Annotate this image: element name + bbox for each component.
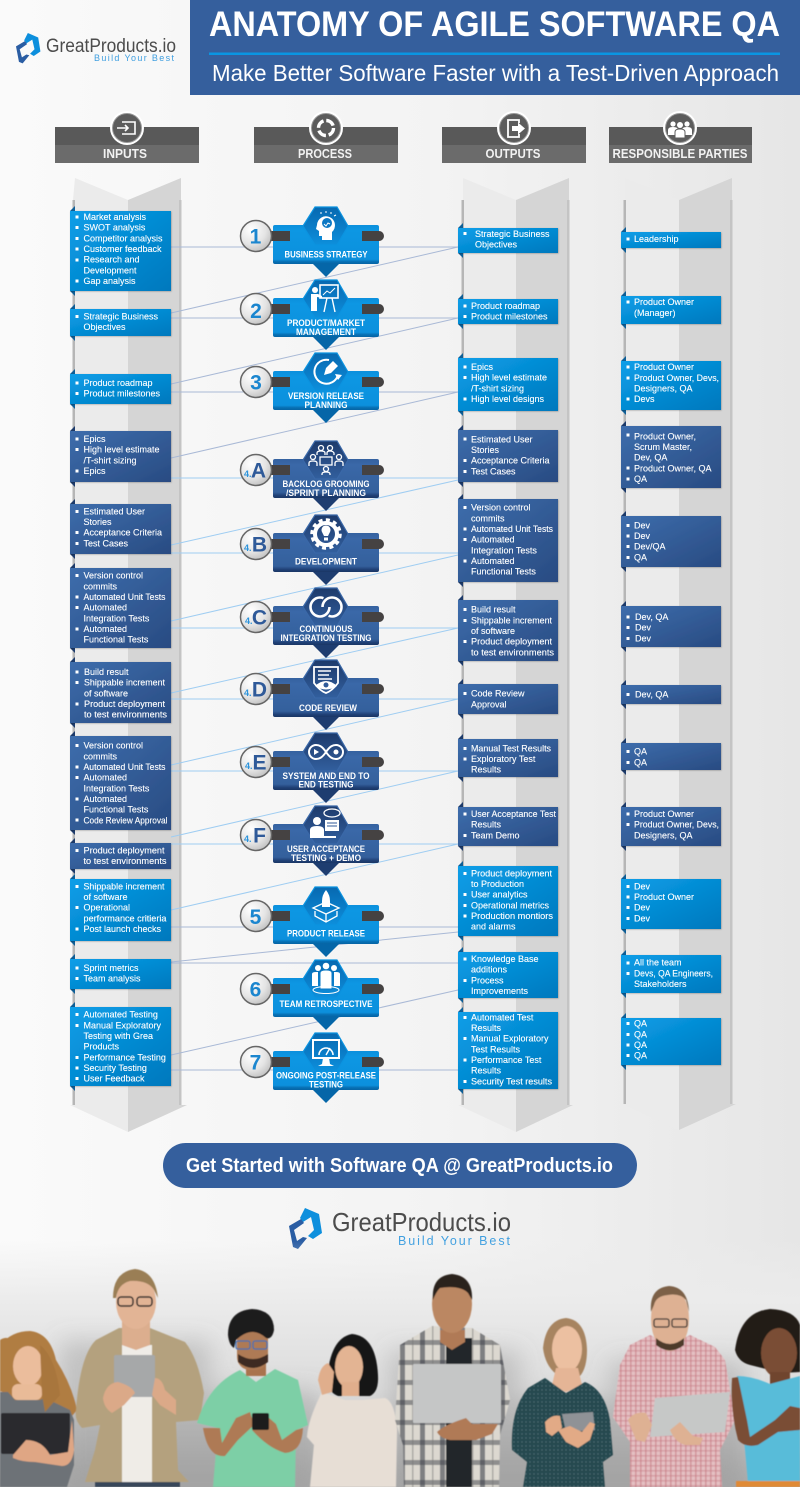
responsible box: dev qa dev dev xyxy=(621,601,721,652)
output box: build result xyxy=(458,595,558,666)
output box: product deployment to production: Production montiors xyxy=(471,911,554,921)
input box: product deployment xyxy=(70,838,171,874)
input box: automated testing: Automated Testing xyxy=(84,1010,158,1020)
process step 4C: continuous integration testing xyxy=(240,588,384,658)
input box: shippable increment: Operational xyxy=(84,903,130,913)
input box: estimated user stories xyxy=(70,499,171,559)
process step 4D: code review: 4. xyxy=(244,688,252,698)
input box: market analysis: Market analysis xyxy=(84,212,147,222)
column ribbon: responsible parties xyxy=(622,178,736,1130)
output box: version control commits: Functional Tests xyxy=(471,567,536,577)
process step 3: version release planning: 3 xyxy=(250,372,262,394)
output box: estimated user stories: Acceptance Criteria xyxy=(471,456,550,466)
input box: version control commits: Version control xyxy=(84,571,143,581)
responsible box: qa four times: QA xyxy=(634,1029,647,1039)
icon: output arrow xyxy=(508,120,519,137)
icon: infinity loop xyxy=(309,745,343,759)
input box: market analysis: Competitor analysis xyxy=(84,233,163,243)
output box: product roadmap: Product milestones xyxy=(471,312,548,322)
process step 3: version release planning: PLANNING xyxy=(304,400,348,410)
input box: epics: Epics xyxy=(84,466,106,476)
output box: knowledge base additions: Improvements xyxy=(471,986,529,996)
input box: version control and code review: Automated xyxy=(84,794,127,804)
process step 4C: continuous integration testing: CONTINUOUS xyxy=(300,624,352,634)
input box: sprint metrics xyxy=(70,954,171,994)
input box: version control and code review: Automated Unit Tests xyxy=(84,762,166,772)
responsible box: product owner manager: Product Owner xyxy=(634,297,694,307)
column header: responsible parties xyxy=(609,111,752,163)
icon: presenter at board xyxy=(311,285,338,312)
responsible box: qa qa xyxy=(621,738,721,775)
responsible box: dev and qa: Dev xyxy=(634,520,651,530)
process step 3: version release planning: VERSION RELEASE xyxy=(288,391,364,401)
output box: epics xyxy=(458,353,558,416)
person 2: man in beige blazer with tablet xyxy=(76,1269,204,1487)
output box: automated test results: Test Results xyxy=(471,1044,521,1054)
input box: shippable increment: of software xyxy=(84,892,128,902)
responsible box: product owner uat: Designers, QA xyxy=(634,830,693,840)
input box: market analysis: Gap analysis xyxy=(84,276,136,286)
output box: product roadmap xyxy=(458,294,558,329)
process step 4F: user acceptance testing and demo: TESTING + DEMO xyxy=(291,853,361,863)
process step 7: ongoing post-release testing: 7 xyxy=(250,1052,261,1074)
output box: knowledge base additions: Process xyxy=(471,975,504,985)
input box: strategic business objectives: Objectives xyxy=(84,322,126,332)
output box: product deployment to production: Operational metrics xyxy=(471,900,550,910)
output box: user acceptance test results: User Acceptance Test xyxy=(471,809,556,819)
output box: automated test results: Manual Exploratory xyxy=(471,1034,549,1044)
output box: product roadmap: Product roadmap xyxy=(471,301,540,311)
column header: inputs xyxy=(55,111,199,163)
output box: automated test results xyxy=(458,1007,558,1094)
logo: bottom centre xyxy=(289,1207,511,1249)
output box: strategic business objectives: Objectives xyxy=(475,240,518,250)
process step 5: product release xyxy=(240,887,384,957)
responsible box: product owner, devs xyxy=(621,356,721,415)
input box: shippable increment: Shippable increment xyxy=(84,881,165,891)
column header: responsible parties: RESPONSIBLE PARTIES xyxy=(612,146,748,161)
column ribbon: inputs xyxy=(70,178,187,1132)
responsible box: product owner, devs: Designers, QA xyxy=(634,384,693,394)
responsible box: qa four times: QA xyxy=(634,1019,647,1029)
input box: estimated user stories: Stories xyxy=(84,517,112,527)
output box: build result: Shippable increment xyxy=(471,615,552,625)
output box: estimated user stories: Estimated User xyxy=(471,434,533,444)
process step 4A: backlog grooming and sprint planning: /SPRINT PLANNING xyxy=(286,488,366,498)
process step 4E: system and end to end testing: E xyxy=(252,752,267,774)
responsible box: scrum master: QA xyxy=(634,474,647,484)
responsible box: all the team xyxy=(621,950,721,998)
input box: epics: Epics xyxy=(84,434,106,444)
column header: process xyxy=(254,111,398,163)
responsible box: leadership: Leadership xyxy=(634,234,679,244)
process step 1: business strategy: BUSINESS STRATEGY xyxy=(284,250,368,260)
outputs column boxes xyxy=(458,223,558,1094)
person 7: bald man in pink shirt with tablet xyxy=(613,1286,735,1487)
input box: automated testing: Testing with Grea xyxy=(84,1031,153,1041)
responsible box: scrum master: Product Owner, xyxy=(634,431,696,441)
output box: version control commits: Integration Tests xyxy=(471,545,537,555)
responsible box: all the team: All the team xyxy=(634,958,682,968)
input box: market analysis xyxy=(70,206,171,296)
process step 5: product release: PRODUCT RELEASE xyxy=(287,928,365,938)
input box: estimated user stories: Test Cases xyxy=(84,538,129,548)
input box: market analysis: Customer feedback xyxy=(84,244,162,254)
input box: shippable increment: Post launch checks xyxy=(84,924,162,934)
input box: estimated user stories: Acceptance Criteria xyxy=(84,528,162,538)
responsible box: dev product owner: Dev xyxy=(634,913,651,923)
call to action button xyxy=(163,1143,637,1188)
input box: automated testing: Products xyxy=(84,1042,120,1052)
input box: market analysis: SWOT analysis xyxy=(84,223,146,233)
column header: inputs: INPUTS xyxy=(103,146,147,161)
input box: estimated user stories: Estimated User xyxy=(84,506,145,516)
responsible box: leadership xyxy=(621,227,721,253)
icon: process cycle xyxy=(318,120,334,136)
output box: epics: /T-shirt sizing xyxy=(471,383,524,393)
output box: build result: of software xyxy=(471,626,515,636)
input box: version control commits: Functional Tests xyxy=(84,635,149,645)
output box: version control commits: Version control xyxy=(471,503,531,513)
output box: knowledge base additions: additions xyxy=(471,965,508,975)
input box: product deployment: Product deployment xyxy=(84,845,165,855)
input box: build result: Shippable increment xyxy=(84,678,165,688)
output box: version control commits: Automated xyxy=(471,556,515,566)
output box: user acceptance test results xyxy=(458,802,558,851)
input box: build result: Product deployment xyxy=(84,699,166,709)
input box: automated testing: Performance Testing xyxy=(84,1052,166,1062)
input box: automated testing xyxy=(70,1002,171,1091)
output box: strategic business objectives: Strategic Business xyxy=(475,229,550,239)
responsible box: dev and qa: Dev xyxy=(634,531,651,541)
process step 4A: backlog grooming and sprint planning: 4. xyxy=(244,469,252,479)
header banner xyxy=(190,0,800,95)
icon: interlocking refresh loops xyxy=(310,598,342,616)
input box: version control and code review xyxy=(70,731,171,835)
process step 4F: user acceptance testing and demo: USER ACCEPTANCE xyxy=(287,844,365,854)
input box: version control commits: Automated Unit Tests xyxy=(84,592,166,602)
responsible box: product owner manager xyxy=(621,291,721,329)
call to action button: Get Started with Software QA @ GreatProducts.io xyxy=(186,1155,613,1177)
icon: document with eye xyxy=(314,667,338,693)
process step 4B: development xyxy=(240,515,384,585)
input box: version control and code review: Code Review Approval xyxy=(84,815,168,825)
output box: version control commits: Automated xyxy=(471,535,515,545)
output box: code review approval: Code Review xyxy=(471,689,525,699)
responsible box: dev product owner: Dev xyxy=(634,903,651,913)
input box: product roadmap: Product milestones xyxy=(84,389,161,399)
process step 3: version release planning xyxy=(240,353,384,423)
process step 1: business strategy: 1 xyxy=(250,226,262,248)
input box: build result xyxy=(70,657,171,728)
responsible box: product owner manager: (Manager) xyxy=(634,308,676,318)
output box: product deployment to production: to Production xyxy=(471,879,524,889)
process step 7: ongoing post-release testing: TESTING xyxy=(309,1080,343,1090)
output box: manual test results: Exploratory Test xyxy=(471,754,536,764)
output box: build result: to test environments xyxy=(471,647,555,657)
responsible box: scrum master: Product Owner, QA xyxy=(634,463,712,473)
output box: epics: High level estimate xyxy=(471,373,547,383)
icon: team of three xyxy=(312,963,340,994)
icon: gear with light bulb xyxy=(312,520,340,548)
person 4: woman on phone in cream sweater xyxy=(307,1334,397,1487)
person 1: curly hair with dark tablet xyxy=(0,1331,77,1487)
process step 7: ongoing post-release testing xyxy=(240,1033,384,1103)
icon: input arrow xyxy=(117,122,135,134)
process step 4C: continuous integration testing: C xyxy=(252,606,267,630)
person shadows xyxy=(60,1340,745,1487)
process step 4E: system and end to end testing xyxy=(240,733,384,803)
output box: automated test results: Results xyxy=(471,1066,502,1076)
responsible box: scrum master: Dev, QA xyxy=(634,453,667,463)
column ribbon: outputs xyxy=(458,178,573,1132)
process step 4C: continuous integration testing: INTEGRATION TESTING xyxy=(280,633,372,643)
output box: version control commits: Automated Unit Tests xyxy=(471,524,553,534)
icon: people xyxy=(668,121,692,138)
input box: epics: High level estimate xyxy=(84,445,160,455)
process step 2: product market management: MANAGEMENT xyxy=(296,327,356,337)
process step 4D: code review: D xyxy=(252,678,267,702)
logo: top left xyxy=(16,33,176,63)
responsible box: dev qa dev dev: Dev xyxy=(635,623,652,633)
responsible box: all the team: Devs, QA Engineers, xyxy=(634,968,713,978)
responsible box: all the team: Stakeholders xyxy=(634,979,687,989)
input box: epics: /T-shirt sizing xyxy=(84,455,137,465)
responsible box: dev qa: Dev, QA xyxy=(635,689,668,699)
process step 4A: backlog grooming and sprint planning xyxy=(240,441,384,511)
responsible box: qa four times: QA xyxy=(634,1040,647,1050)
output box: build result: Build result xyxy=(471,605,516,615)
responsible box: dev qa dev dev: Dev xyxy=(635,633,652,643)
icon: rocket over box xyxy=(313,890,339,922)
process step 4F: user acceptance testing and demo: 4. xyxy=(244,834,252,844)
process step 4E: system and end to end testing: END TESTING xyxy=(298,780,354,790)
process step 6: team retrospective: TEAM RETROSPECTIVE xyxy=(280,999,372,1009)
output box: user acceptance test results: Team Demo xyxy=(471,830,520,840)
process step 4D: code review: CODE REVIEW xyxy=(299,703,357,713)
responsible box: scrum master xyxy=(621,421,721,493)
input box: epics xyxy=(70,426,171,487)
process step 1: business strategy xyxy=(240,207,384,277)
input box: market analysis: Research and xyxy=(84,255,140,265)
input box: version control commits: Automated xyxy=(84,603,127,613)
output box: code review approval xyxy=(458,679,558,719)
input box: automated testing: User Feedback xyxy=(84,1074,145,1084)
process step 2: product market management: 2 xyxy=(250,300,262,323)
responsible box: product owner uat: Product Owner, Devs, xyxy=(634,820,719,830)
input box: strategic business objectives xyxy=(70,304,171,341)
input box: market analysis: Development xyxy=(84,265,137,275)
responsible box: dev and qa: Dev/QA xyxy=(634,542,666,552)
input box: build result: of software xyxy=(84,688,128,698)
output box: version control commits: commits xyxy=(471,513,505,523)
process step 6: team retrospective xyxy=(240,960,384,1030)
process step 4B: development: 4. xyxy=(244,543,252,553)
output box: strategic business objectives xyxy=(458,223,558,258)
input box: product roadmap: Product roadmap xyxy=(84,378,153,388)
input box: version control commits: Automated xyxy=(84,624,127,634)
output box: automated test results: Performance Test xyxy=(471,1055,542,1065)
responsible box: product owner, devs: Product Owner, Devs, xyxy=(634,373,719,383)
logo: bottom centre: Build Your Best xyxy=(398,1234,511,1248)
input box: shippable increment xyxy=(70,874,171,946)
output box: product deployment to production xyxy=(458,861,558,941)
process step 4B: development: B xyxy=(252,534,267,556)
responsible box: product owner, devs: Devs xyxy=(634,394,655,404)
responsible box: dev qa dev dev: Dev, QA xyxy=(635,612,668,622)
column header: outputs: OUTPUTS xyxy=(486,146,541,161)
responsible box: scrum master: Scrum Master, xyxy=(634,442,692,452)
output box: automated test results: Automated Test xyxy=(471,1012,534,1022)
responsible parties column boxes xyxy=(621,227,721,1070)
responsible box: qa qa: QA xyxy=(634,747,647,757)
input box: automated testing: Manual Exploratory xyxy=(84,1020,162,1030)
output box: automated test results: Security Test results xyxy=(471,1076,552,1086)
connector lines: blue steps xyxy=(171,247,458,1070)
input box: version control and code review: Integration Tests xyxy=(84,783,150,793)
output box: automated test results: Results xyxy=(471,1023,502,1033)
input box: strategic business objectives: Strategic Business xyxy=(84,311,159,321)
icon: monitor with gauge xyxy=(313,1040,339,1066)
photo: wall shading xyxy=(0,1240,800,1487)
input box: product roadmap xyxy=(70,369,171,409)
process step 4F: user acceptance testing and demo: F xyxy=(253,824,266,848)
process step 4E: system and end to end testing: 4. xyxy=(245,761,253,771)
input box: build result: to test environments xyxy=(84,710,168,720)
input box: version control and code review: commits xyxy=(84,751,117,761)
icon: circular arrow with pencil xyxy=(314,360,342,384)
column header: process: PROCESS xyxy=(298,146,352,161)
process step 4A: backlog grooming and sprint planning: A xyxy=(251,460,266,482)
input box: version control and code review: Automated xyxy=(84,773,127,783)
process step 4D: code review xyxy=(240,660,384,730)
process step 5: product release: 5 xyxy=(250,906,262,929)
input box: version control and code review: Functional Tests xyxy=(84,805,149,815)
output box: manual test results: Manual Test Results xyxy=(471,743,551,753)
input box: sprint metrics: Team analysis xyxy=(84,974,141,984)
input box: shippable increment: performance critieria xyxy=(84,913,166,923)
process step 4B: development: DEVELOPMENT xyxy=(295,556,357,566)
photo: team of eight people with devices xyxy=(0,1269,800,1487)
responsible box: dev and qa: QA xyxy=(634,552,647,562)
input box: product deployment: to test environments xyxy=(84,856,167,866)
inputs column boxes xyxy=(70,206,171,1091)
output box: build result: Product deployment xyxy=(471,637,553,647)
responsible box: dev product owner: Product Owner xyxy=(634,892,694,902)
process step 4C: continuous integration testing: 4. xyxy=(245,616,253,626)
output box: estimated user stories xyxy=(458,425,558,487)
responsible box: dev and qa xyxy=(621,511,721,572)
input box: version control and code review: Version control xyxy=(84,741,143,751)
process step 4F: user acceptance testing and demo xyxy=(240,806,384,876)
output box: version control commits xyxy=(458,494,558,587)
icon: user with screen xyxy=(310,809,340,838)
person 5: man in plaid shirt with laptop xyxy=(395,1274,510,1487)
process step 6: team retrospective: 6 xyxy=(250,978,261,1002)
input box: version control commits: Integration Tests xyxy=(84,613,150,623)
process step 7: ongoing post-release testing: ONGOING POST-RELEASE xyxy=(276,1070,376,1080)
column header: outputs xyxy=(442,111,586,163)
responsible box: qa four times: QA xyxy=(634,1051,647,1061)
output box: estimated user stories: Stories xyxy=(471,445,500,455)
person 6: woman in teal sweater with tablet xyxy=(512,1318,613,1487)
connector lines: navy steps xyxy=(171,478,458,910)
output box: knowledge base additions: Knowledge Base xyxy=(471,954,539,964)
output box: code review approval: Approval xyxy=(471,699,507,709)
person 3: man in turban and green tee xyxy=(197,1309,308,1487)
subtitle: Make Better Software Faster with a Test-Driven Approach xyxy=(212,60,779,86)
logo: top left: GreatProducts.io xyxy=(46,36,176,57)
output box: product deployment to production: and alarms xyxy=(471,922,516,932)
process step 4E: system and end to end testing: SYSTEM AND END TO xyxy=(282,771,370,781)
responsible box: product owner uat xyxy=(621,802,721,851)
logo: bottom centre: GreatProducts.io xyxy=(332,1207,511,1237)
input box: build result: Build result xyxy=(84,667,129,677)
input box: version control commits: commits xyxy=(84,581,117,591)
responsible box: product owner uat: Product Owner xyxy=(634,809,694,819)
responsible box: dev qa xyxy=(621,680,721,709)
output box: manual test results: Results xyxy=(471,765,502,775)
input box: sprint metrics: Sprint metrics xyxy=(84,963,139,973)
icon: head with chart xyxy=(316,211,336,240)
process step 2: product market management xyxy=(240,280,384,350)
output box: user acceptance test results: Results xyxy=(471,820,502,830)
responsible box: dev product owner xyxy=(621,874,721,934)
process step 2: product market management: PRODUCT/MARKET xyxy=(287,318,365,328)
responsible box: qa qa: QA xyxy=(634,757,647,767)
output box: product deployment to production: User analytics xyxy=(471,890,528,900)
responsible box: dev product owner: Dev xyxy=(634,881,651,891)
responsible box: qa four times xyxy=(621,1013,721,1070)
output box: knowledge base additions xyxy=(458,947,558,1003)
output box: estimated user stories: Test Cases xyxy=(471,466,516,476)
logo: top left: Build Your Best xyxy=(94,53,174,63)
input box: automated testing: Security Testing xyxy=(84,1063,147,1073)
person 8: woman with afro in blue tank top xyxy=(732,1309,800,1487)
output box: product deployment to production: Product deployment xyxy=(471,868,553,878)
input box: version control commits xyxy=(70,563,171,653)
responsible box: product owner, devs: Product Owner xyxy=(634,362,694,372)
header divider xyxy=(209,52,780,55)
output box: epics: High level designs xyxy=(471,394,545,404)
output box: epics: Epics xyxy=(471,362,494,372)
icon: team around table xyxy=(309,446,343,475)
process step 4A: backlog grooming and sprint planning: BACKLOG GROOMING xyxy=(282,479,370,489)
output box: manual test results xyxy=(458,734,558,782)
